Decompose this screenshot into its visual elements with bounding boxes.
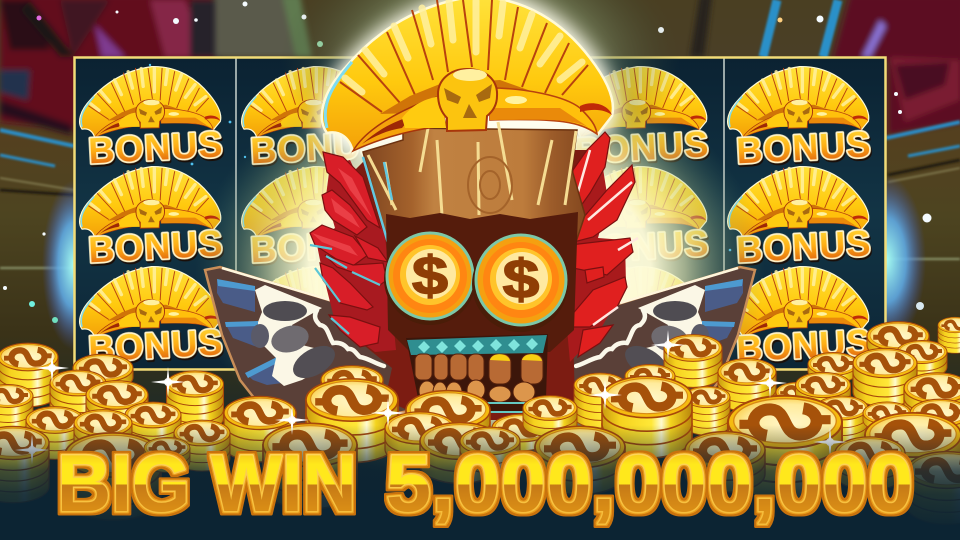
left feather shading [312, 168, 372, 256]
bonus symbol column 2: BONUS [249, 222, 385, 270]
top olive beams [215, 0, 712, 57]
bonus symbol column 4: BONUS [573, 123, 709, 171]
wood mask [363, 128, 585, 245]
dark face [386, 212, 578, 352]
upper teeth [415, 354, 543, 384]
middle coin pile [0, 372, 960, 462]
right side glow [846, 175, 926, 345]
panel frame [74, 58, 886, 370]
coin sparkles [15, 330, 847, 465]
back coin pile [0, 317, 960, 431]
bottom fade [0, 425, 960, 540]
left feather accents [310, 157, 388, 334]
left feather mass [316, 160, 396, 352]
totem mask [205, 0, 755, 430]
bonus symbol column 4: BONUS [573, 321, 709, 369]
right red feathers [562, 132, 635, 357]
title: big win amount: BIG WIN [57, 437, 357, 529]
right feather highlights [578, 150, 638, 325]
bonus symbol column 2 [242, 67, 385, 369]
wood plank details [363, 122, 576, 243]
bonus symbol column 1: BONUS [87, 123, 223, 171]
reel dividers [236, 58, 724, 368]
crown [322, 0, 613, 152]
bonus symbol column 1: BONUS [87, 321, 223, 369]
bonus symbol column 5: BONUS [735, 321, 871, 369]
left eye coin [384, 233, 476, 325]
front coin pile [0, 376, 960, 524]
reel sparkles [149, 64, 771, 251]
bonus symbol column 5: BONUS [735, 222, 871, 270]
blue light beams [0, 0, 960, 268]
bonus symbol column 5: BONUS [735, 123, 871, 171]
bonus symbol column 5 [728, 67, 871, 369]
bonus symbol column 2: BONUS [249, 123, 385, 171]
mouth [406, 334, 548, 412]
bonus symbol column 4 [566, 67, 709, 369]
sparkles [3, 2, 932, 323]
title: big win amount: 5,000,000,000 [386, 439, 913, 529]
left red feathers [310, 152, 388, 347]
red curtain right [832, 0, 960, 135]
left side glow [42, 180, 106, 350]
title: big win amount [57, 437, 913, 529]
right eye coin: $ [503, 248, 539, 310]
lower teeth [419, 380, 535, 402]
left eye coin: $ [412, 245, 448, 306]
totem glow [195, 0, 765, 487]
right feather mass [558, 150, 626, 362]
slot reels panel [74, 58, 886, 370]
crown halo [323, 0, 612, 152]
bonus symbol column 1: BONUS [87, 222, 223, 270]
feather backing [338, 150, 590, 420]
bonus symbol column 1 [80, 67, 223, 369]
left wing [205, 267, 415, 430]
right eye coin [472, 235, 568, 332]
bonus symbol column 4: BONUS [573, 222, 709, 270]
red curtain left [0, 0, 222, 135]
right wing [545, 267, 755, 430]
bonus symbol column 2: BONUS [249, 321, 385, 369]
